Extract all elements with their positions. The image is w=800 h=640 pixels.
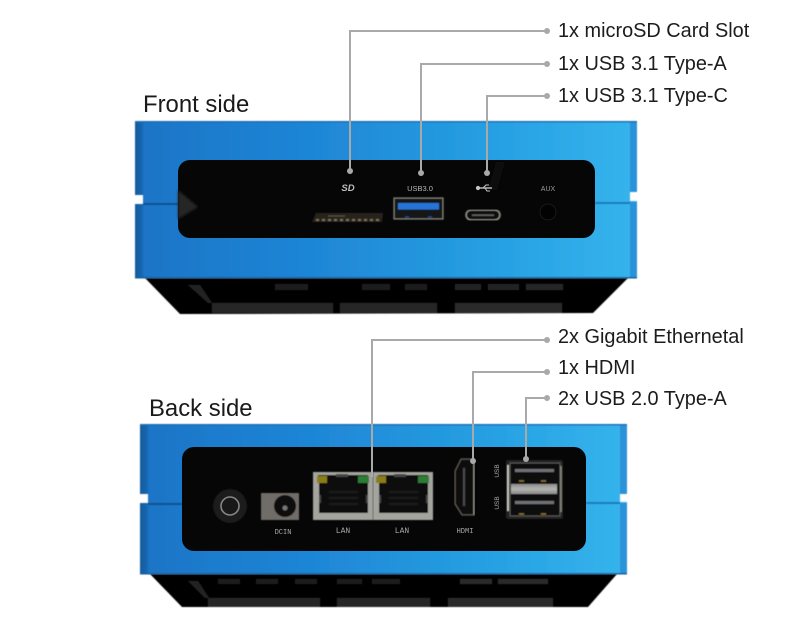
port: LAN 2 <box>373 472 433 520</box>
callout: microSD Card Slot <box>347 20 750 174</box>
label: AUX: AUX <box>541 186 556 193</box>
heading: back side: Back side <box>149 395 253 422</box>
callout: microSD Card Slot: 1x microSD Card Slot <box>558 20 750 42</box>
icon: USB symbol <box>476 185 492 191</box>
callout: USB 2.0 Type-A: 2x USB 2.0 Type-A <box>558 388 728 410</box>
callout: USB 3.1 Type-A: 1x USB 3.1 Type-A <box>558 53 728 75</box>
back port panel <box>182 447 586 551</box>
front blue casing <box>135 121 637 278</box>
port: microSD slot <box>312 213 383 222</box>
port: DC in <box>261 493 299 520</box>
back base and vents <box>150 574 617 607</box>
callout: HDMI: 1x HDMI <box>558 357 635 379</box>
label: DCIN: DCIN <box>275 529 291 537</box>
callout: USB 3.1 Type-A <box>418 53 728 176</box>
front port panel <box>178 160 595 238</box>
port: dual USB 2.0 <box>506 460 563 519</box>
back blue casing <box>140 424 627 574</box>
callout: HDMI <box>470 357 635 464</box>
panel reflection <box>488 162 505 190</box>
label: LAN 1: LAN <box>336 527 350 536</box>
port: AUX jack <box>540 204 556 220</box>
icon: SD logo: SD <box>341 183 355 194</box>
callout: USB 2.0 Type-A <box>523 388 728 462</box>
label: USB3.0: USB3.0 <box>407 184 433 193</box>
heading: front side: Front side <box>143 91 249 118</box>
label: LAN 2: LAN <box>395 527 409 536</box>
callout: USB 3.1 Type-C: 1x USB 3.1 Type-C <box>558 85 728 107</box>
port: LAN 1 <box>313 472 373 520</box>
front base and vents <box>145 278 628 314</box>
port: HDMI <box>455 459 474 515</box>
label: USB upper: USB <box>494 464 501 478</box>
device: back side <box>140 424 627 607</box>
label: USB lower: USB <box>494 496 501 510</box>
port: USB 3.1 Type-C <box>466 210 500 220</box>
device: front side <box>135 121 637 314</box>
callout: Gigabit Ethernet <box>372 326 744 477</box>
panel corner highlight <box>178 190 198 219</box>
callout: Gigabit Ethernet: 2x Gigabit Ethernetal <box>558 326 744 348</box>
port: USB 3.1 Type-A <box>394 198 443 219</box>
callout: USB 3.1 Type-C <box>484 85 728 176</box>
label: HDMI: HDMI <box>457 528 473 536</box>
power button <box>213 489 247 523</box>
